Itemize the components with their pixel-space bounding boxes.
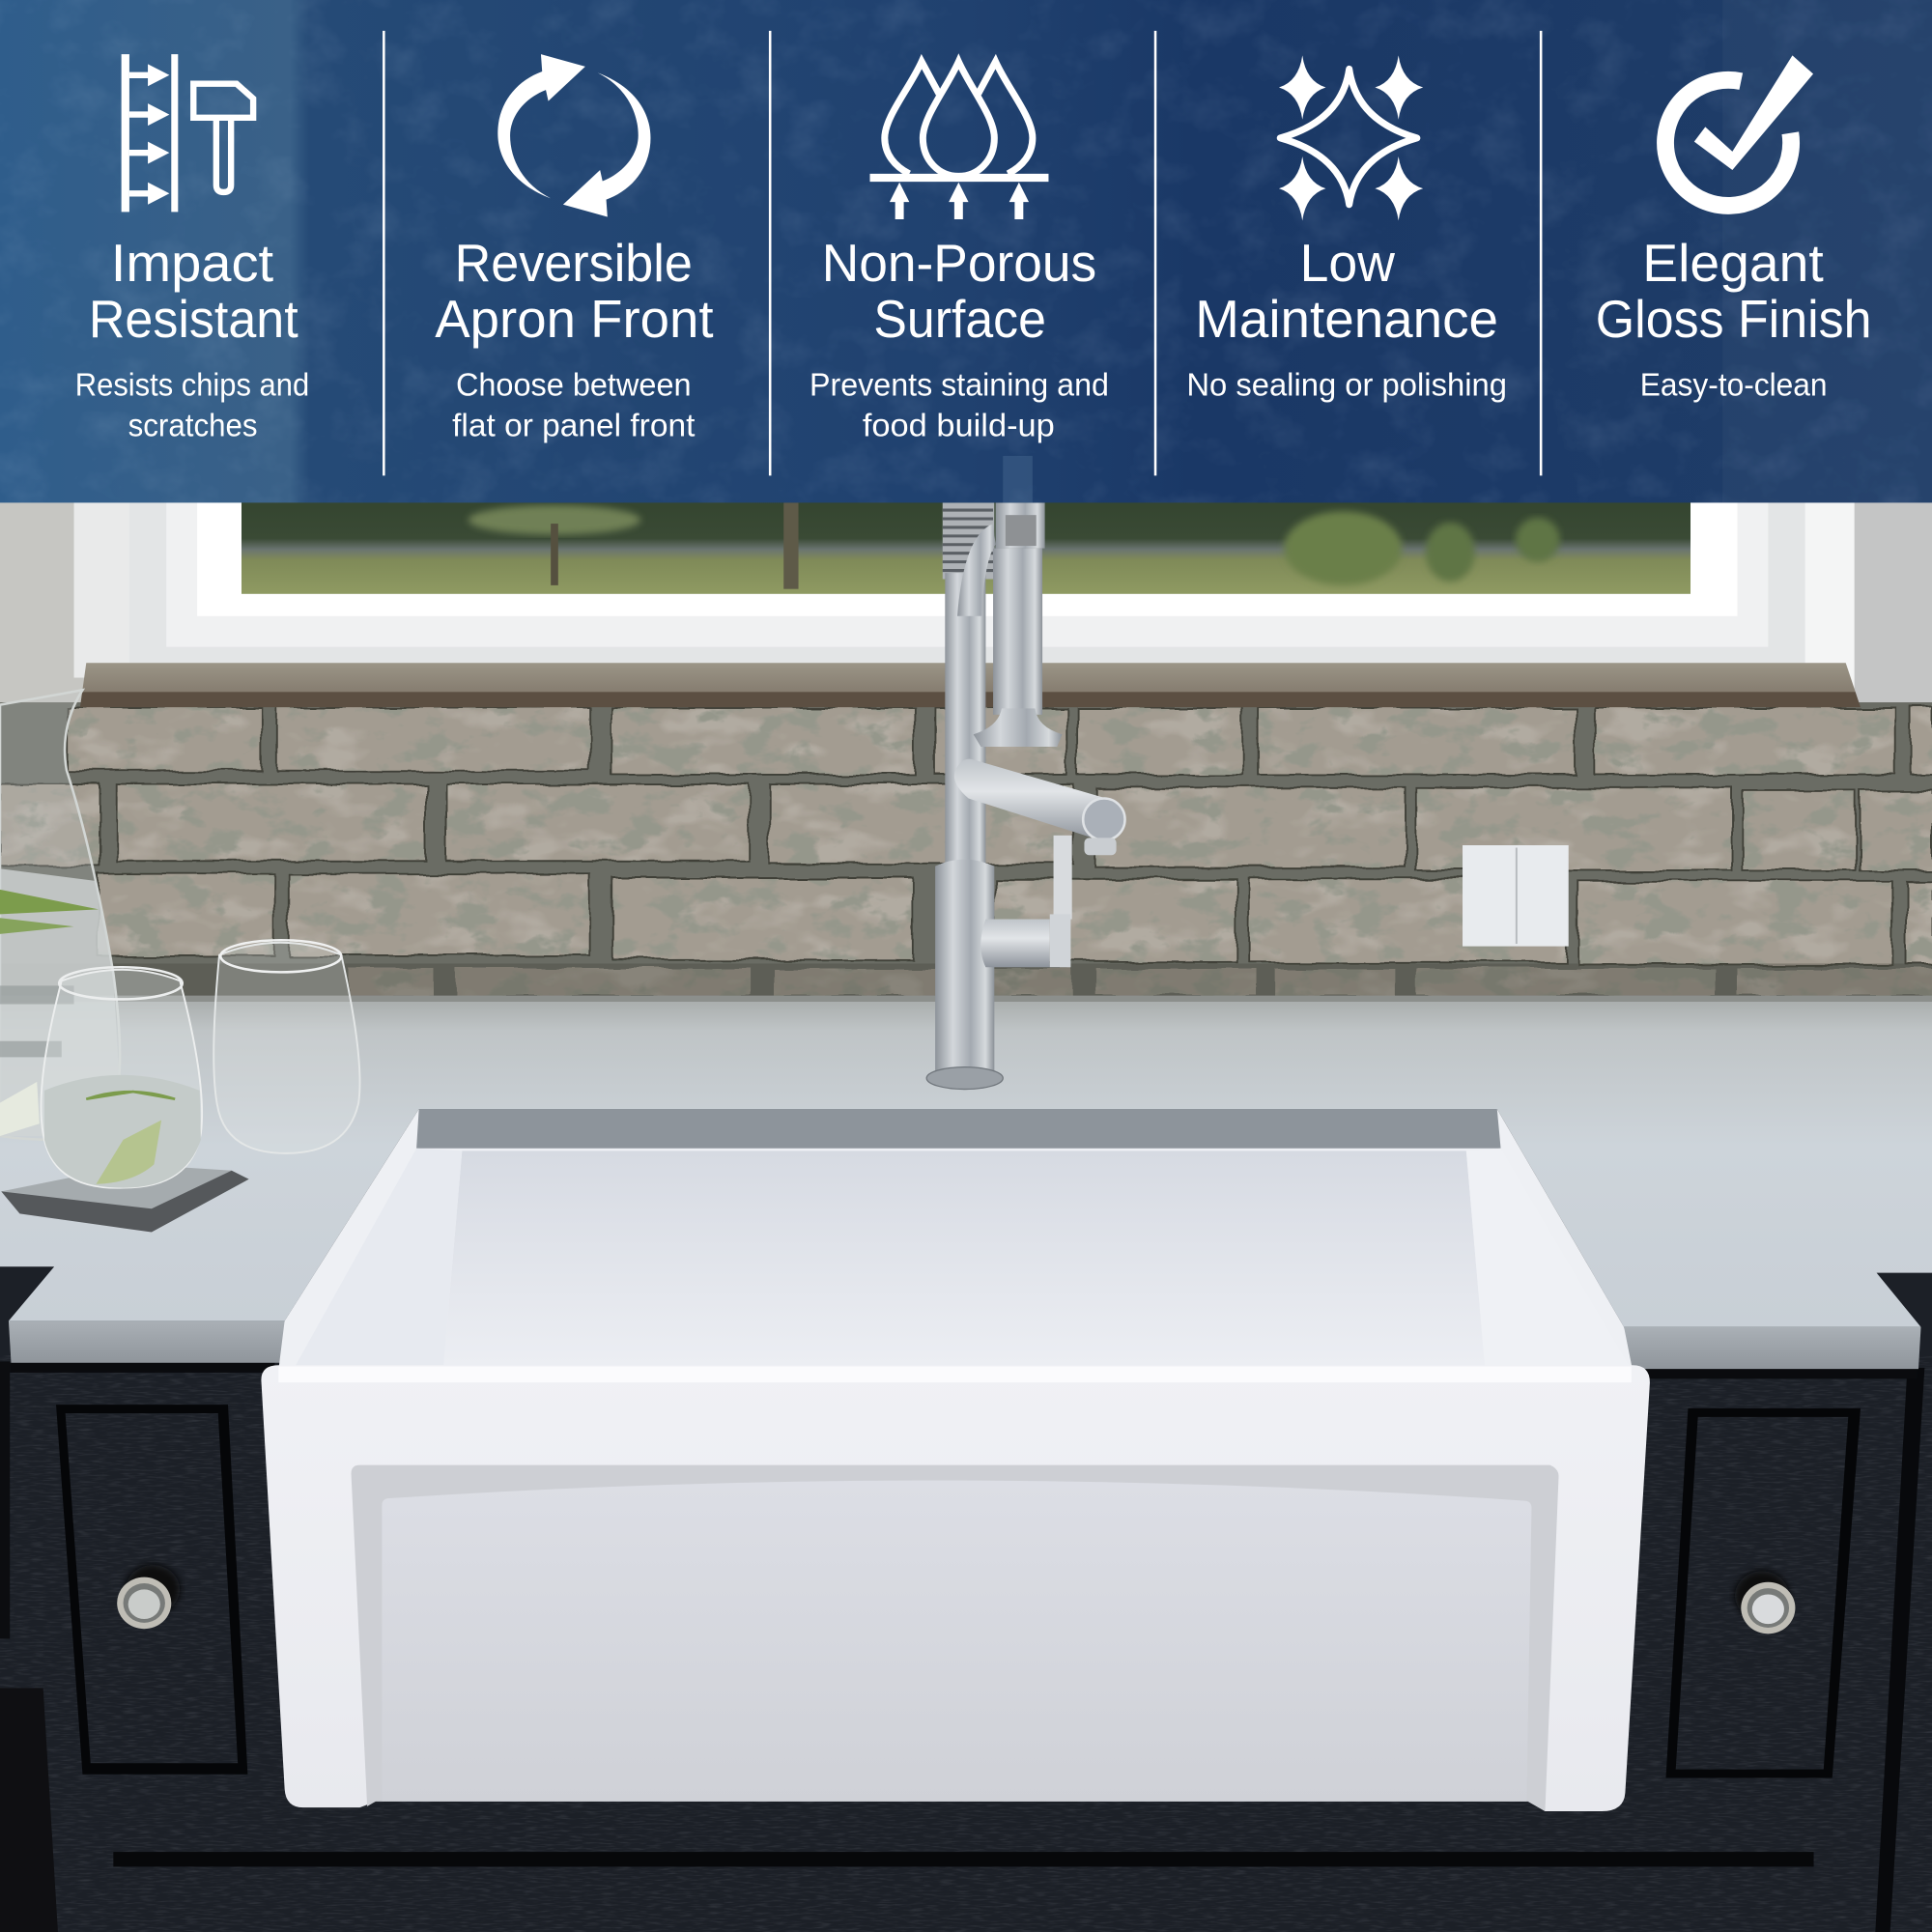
title: Resistant: [89, 289, 298, 349]
title: Surface: [873, 289, 1046, 349]
neck: [957, 524, 996, 616]
icon: reverse arrows: [497, 54, 650, 216]
sink interior: [278, 1109, 1633, 1370]
apron recessed frame: [352, 1465, 1559, 1811]
icon: wall and hammer: [122, 54, 253, 212]
title: [822, 233, 1096, 349]
description: Easy-to-clean: [1640, 367, 1828, 403]
title: [1596, 233, 1871, 349]
countertop front edge left: [9, 1321, 285, 1363]
water glass: [41, 967, 202, 1188]
outdoor trees: [469, 502, 1560, 589]
description: [75, 367, 309, 444]
column: low maintenance: [1186, 55, 1507, 403]
description: scratches: [128, 409, 258, 444]
blue banner: [0, 0, 1932, 502]
icon: sparkles: [1279, 55, 1423, 220]
sprayer head: [974, 708, 1062, 747]
description: [452, 367, 695, 444]
countertop front edge right: [1624, 1327, 1921, 1369]
empty glass: [213, 940, 360, 1153]
icon: check circle: [1665, 55, 1813, 206]
description: flat or panel front: [452, 409, 695, 444]
hose spring: [943, 502, 994, 579]
title: Gloss Finish: [1596, 289, 1871, 349]
description: food build-up: [863, 409, 1055, 444]
base column: [935, 860, 994, 1072]
title: [435, 233, 714, 349]
description: No sealing or polishing: [1186, 367, 1507, 403]
title: Apron Front: [435, 289, 714, 349]
column: non-porous surface: [810, 62, 1109, 444]
wall and window: [0, 493, 1932, 708]
column: reversible apron front: [435, 54, 714, 444]
handle: [980, 836, 1072, 967]
toe groove: [113, 1852, 1814, 1866]
description: Choose between: [456, 367, 692, 403]
right door panel: [1665, 1408, 1861, 1778]
title: Non-Porous: [822, 233, 1096, 293]
apron raised panel: [382, 1481, 1531, 1802]
column: impact resistant: [75, 54, 309, 444]
napkin: [1, 1164, 249, 1233]
title: Elegant: [1642, 233, 1824, 293]
window sill: [80, 663, 1861, 707]
left door panel: [56, 1405, 247, 1775]
sprayer body: [993, 549, 1042, 715]
foot: [926, 1067, 1003, 1090]
sprayer collar: [996, 502, 1045, 549]
faucet ghost: [1003, 456, 1033, 502]
faucet: [926, 502, 1125, 1090]
icon: water drops: [870, 62, 1048, 219]
apron front: [261, 1365, 1650, 1811]
title: Reversible: [455, 233, 693, 293]
description: Resists chips and: [75, 367, 309, 403]
cabinet base: [0, 1266, 1932, 1932]
right knob: [1735, 1571, 1795, 1634]
column: elegant gloss finish: [1596, 55, 1871, 403]
title: Impact: [111, 233, 273, 293]
countertop: [0, 996, 1932, 1369]
title: [1195, 233, 1498, 349]
left knob: [117, 1565, 180, 1629]
description: Prevents staining and: [810, 367, 1109, 403]
title: Maintenance: [1195, 289, 1498, 349]
dividers: [384, 31, 1541, 475]
window view: [242, 493, 1690, 594]
pitcher: [0, 690, 120, 1140]
title: Low: [1300, 233, 1395, 293]
sink: [261, 1109, 1650, 1811]
switch plate: [1463, 845, 1569, 947]
main column: [945, 573, 985, 868]
spout: [954, 759, 1125, 855]
brick backsplash: [0, 702, 1932, 1005]
description: [810, 367, 1109, 444]
title: [89, 233, 298, 349]
